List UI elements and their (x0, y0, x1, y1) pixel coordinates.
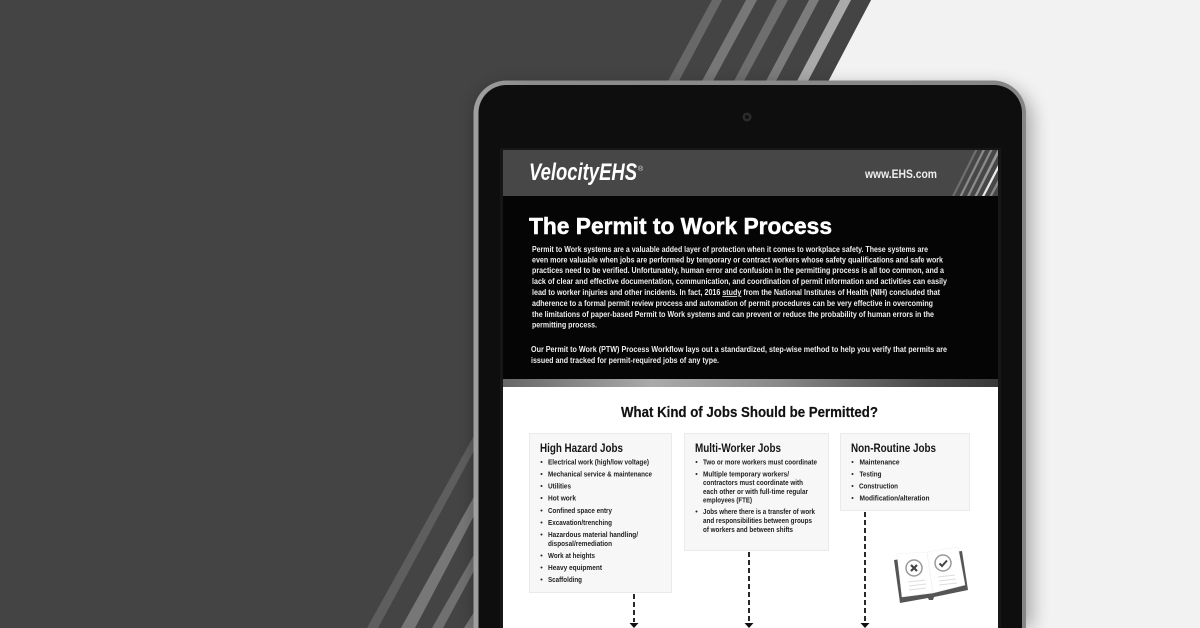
bottom-left diagonal stripes (367, 432, 476, 628)
list: and responsibilities between groups (703, 516, 812, 525)
tablet bezel (478, 85, 1022, 628)
workflow paragraph: issued and tracked for permit-required jobs of any type. (531, 356, 719, 365)
logo: ® (638, 165, 644, 173)
document white background (503, 387, 998, 628)
list: each other or with full-time regular (703, 487, 808, 496)
list: Excavation/trenching (548, 518, 612, 527)
panel: high hazard jobs (530, 434, 672, 592)
list: disposal/remediation (548, 539, 612, 548)
list: Two or more workers must coordinate (703, 457, 817, 466)
list: Scaffolding (548, 575, 582, 584)
list: Hot work (548, 493, 577, 502)
gradient divider (503, 379, 998, 387)
intro paragraph: permitting process. (532, 320, 597, 330)
logo: VelocityEHS (529, 159, 637, 186)
panel: multi-worker jobs (684, 434, 828, 550)
list (696, 457, 817, 534)
list: Testing (860, 469, 882, 478)
list: Modification/alteration (860, 493, 930, 502)
icon: open book (894, 547, 968, 603)
panel heading: Multi-Worker Jobs (695, 441, 781, 455)
intro paragraph: the limitations of paper-based Permit to Work systems and can prevent or reduce the probability of human errors in the (532, 310, 934, 319)
title: The Permit to Work Process (529, 213, 832, 239)
intro paragraph: lead to worker injuries and other incidents. In fact, 2016 study from the National Institutes of Health (NIH) concluded that (532, 288, 940, 297)
list: Mechanical service & maintenance (548, 469, 652, 478)
list: Multiple temporary workers/ (703, 469, 789, 478)
document black intro background (503, 150, 998, 390)
list: Construction (859, 481, 898, 490)
list: Confined space entry (548, 506, 613, 515)
list (540, 457, 652, 584)
intro paragraph: lack of clear and effective documentation, communication, and coordination of permit information and activities can easily (532, 277, 947, 286)
intro paragraph: practices need to be verified. Unfortunately, human error and confusion in the permitting process is all too common, and a (532, 266, 944, 275)
list: Jobs where there is a transfer of work (703, 507, 816, 516)
panel: non-routine jobs (840, 434, 970, 510)
document screen (500, 148, 1001, 628)
panel heading: Non-Routine Jobs (851, 441, 936, 455)
list: employees (FTE) (703, 496, 752, 504)
website: www.EHS.com (864, 169, 937, 181)
list: Electrical work (high/low voltage) (548, 457, 649, 466)
arrow: high hazard (630, 594, 638, 628)
tablet shadow (476, 86, 1032, 628)
header band (503, 150, 998, 196)
list: Hazardous material handling/ (548, 530, 638, 539)
list: Utilities (548, 481, 571, 490)
document edge (500, 148, 1001, 628)
intro paragraph: even more valuable when jobs are performed by temporary or contract workers whose safety qualifications and safe work (532, 256, 943, 264)
list (852, 457, 930, 502)
tablet frame (474, 80, 1026, 628)
workflow paragraph: Our Permit to Work (PTW) Process Workflow lays out a standardized, step-wise method to help you verify that permits are (531, 345, 947, 354)
list: Maintenance (860, 457, 900, 466)
panel heading: High Hazard Jobs (540, 441, 623, 455)
header stripes (952, 150, 998, 196)
list: of workers and between shifts (703, 525, 793, 534)
arrow: multi-worker (744, 552, 754, 628)
list: contractors must coordinate with (703, 478, 803, 487)
intro paragraph: adherence to a formal permit review process and automation of permit procedures can be very effective in overcoming (532, 299, 933, 308)
tablet device (474, 80, 1026, 628)
section heading: What Kind of Jobs Should be Permitted? (621, 405, 878, 421)
intro paragraph: Permit to Work systems are a valuable added layer of protection when it comes to workplace safety. These systems are (532, 245, 928, 254)
list: Work at heights (548, 551, 595, 560)
camera (742, 112, 752, 122)
list: Heavy equipment (548, 563, 602, 572)
arrow: non-routine (860, 512, 870, 628)
workflow paragraph (531, 345, 947, 365)
top diagonal stripes (668, 0, 851, 81)
intro paragraph (532, 245, 947, 330)
